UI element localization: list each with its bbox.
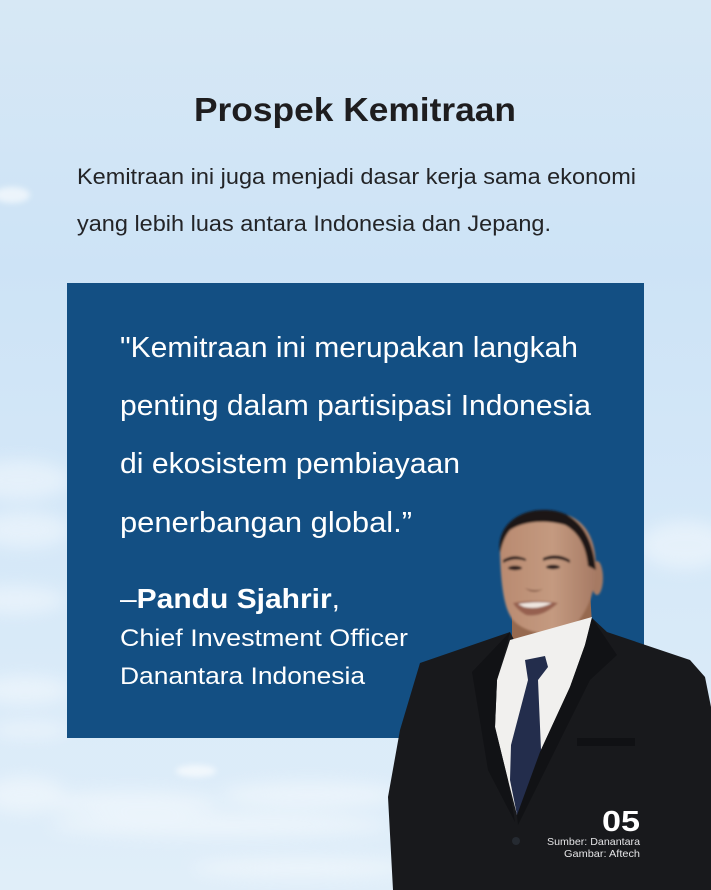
attribution: –Pandu Sjahrir , [120, 583, 340, 614]
attribution: Danantara Indonesia [120, 663, 365, 690]
portrait: Pandu Sjahrir [388, 510, 711, 890]
intro text [77, 164, 636, 236]
quote text: penerbangan global.” [120, 507, 412, 539]
source credits [547, 836, 640, 860]
intro text: yang lebih luas antara Indonesia dan Jepang. [77, 211, 551, 236]
head [500, 510, 603, 633]
button [512, 837, 520, 845]
title: Prospek Kemitraan [194, 91, 516, 128]
intro text: Kemitraan ini juga menjadi dasar kerja sama ekonomi [77, 164, 636, 189]
tie [510, 656, 548, 815]
page number: 05 [602, 806, 640, 838]
lapel right [517, 618, 617, 825]
source credits: Gambar: Aftech [564, 848, 640, 860]
quote text [120, 332, 592, 539]
quote text: di ekosistem pembiayaan [120, 448, 460, 480]
quote text: penting dalam partisipasi Indonesia [120, 390, 592, 422]
attribution [120, 583, 408, 690]
pocket [577, 738, 635, 746]
quote text: "Kemitraan ini merupakan langkah [120, 332, 578, 364]
lapel left [472, 632, 515, 822]
source credits: Sumber: Danantara [547, 836, 640, 848]
neck [512, 590, 592, 665]
attribution: Chief Investment Officer [120, 625, 408, 652]
suit [388, 618, 711, 890]
shirt [495, 617, 592, 815]
panel: quote [67, 283, 644, 738]
